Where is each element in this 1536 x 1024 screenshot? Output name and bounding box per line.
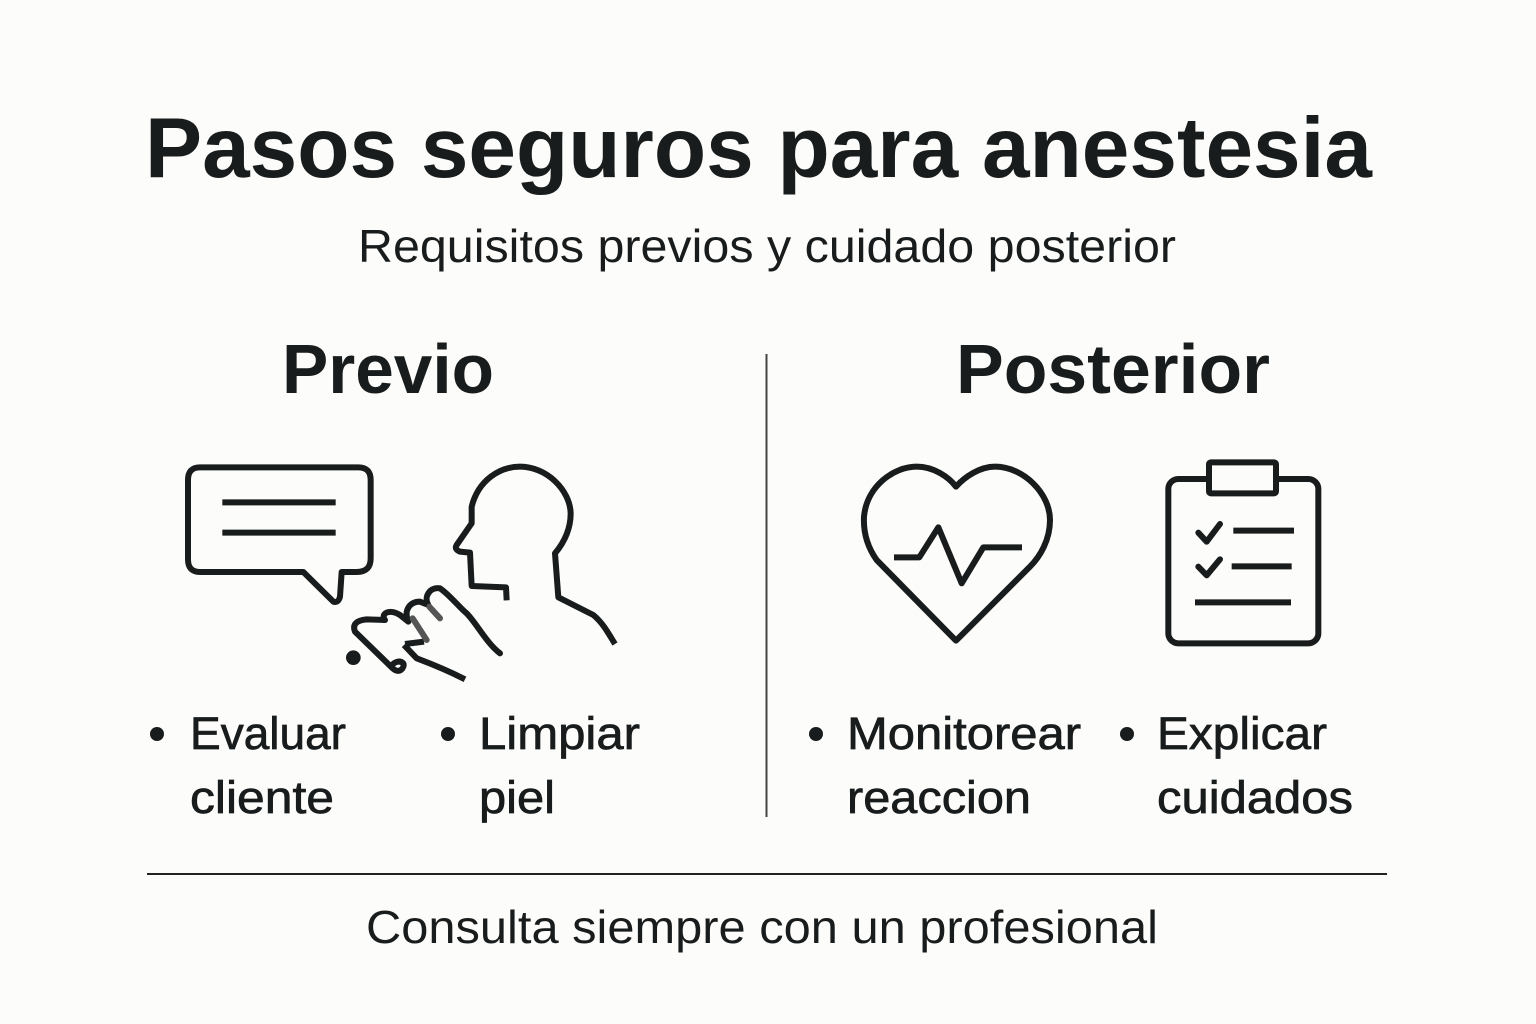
list item: evaluar cliente bbox=[150, 708, 346, 823]
icon: heart with pulse bbox=[864, 467, 1050, 641]
icon: speech bubble bbox=[188, 467, 371, 602]
icon: hand bbox=[346, 588, 500, 679]
footer note: Consulta siempre con un profesional bbox=[366, 901, 1158, 953]
panel: posterior bbox=[809, 330, 1353, 823]
list item: limpiar piel: Limpiar bbox=[479, 708, 640, 759]
icon: person profile bbox=[456, 467, 615, 644]
heading: previo: Previo bbox=[282, 330, 494, 408]
title: Pasos seguros para anestesia bbox=[145, 101, 1373, 196]
list item: explicar cuidados: cuidados bbox=[1157, 772, 1353, 823]
subtitle: Requisitos previos y cuidado posterior bbox=[358, 220, 1176, 272]
list item: explicar cuidados bbox=[1120, 708, 1353, 823]
panel: previo bbox=[150, 330, 640, 823]
list item: evaluar cliente: Evaluar bbox=[190, 708, 346, 759]
icon: clipboard checklist bbox=[1168, 462, 1318, 643]
heading: posterior: Posterior bbox=[956, 330, 1270, 408]
list item: evaluar cliente: cliente bbox=[190, 772, 334, 823]
list item: limpiar piel: piel bbox=[479, 772, 555, 823]
list item: monitorear reaccion: reaccion bbox=[847, 772, 1031, 823]
list item: limpiar piel bbox=[441, 708, 640, 823]
list item: explicar cuidados: Explicar bbox=[1157, 708, 1327, 759]
list item: monitorear reaccion bbox=[809, 708, 1081, 823]
list item: monitorear reaccion: Monitorear bbox=[847, 708, 1081, 759]
